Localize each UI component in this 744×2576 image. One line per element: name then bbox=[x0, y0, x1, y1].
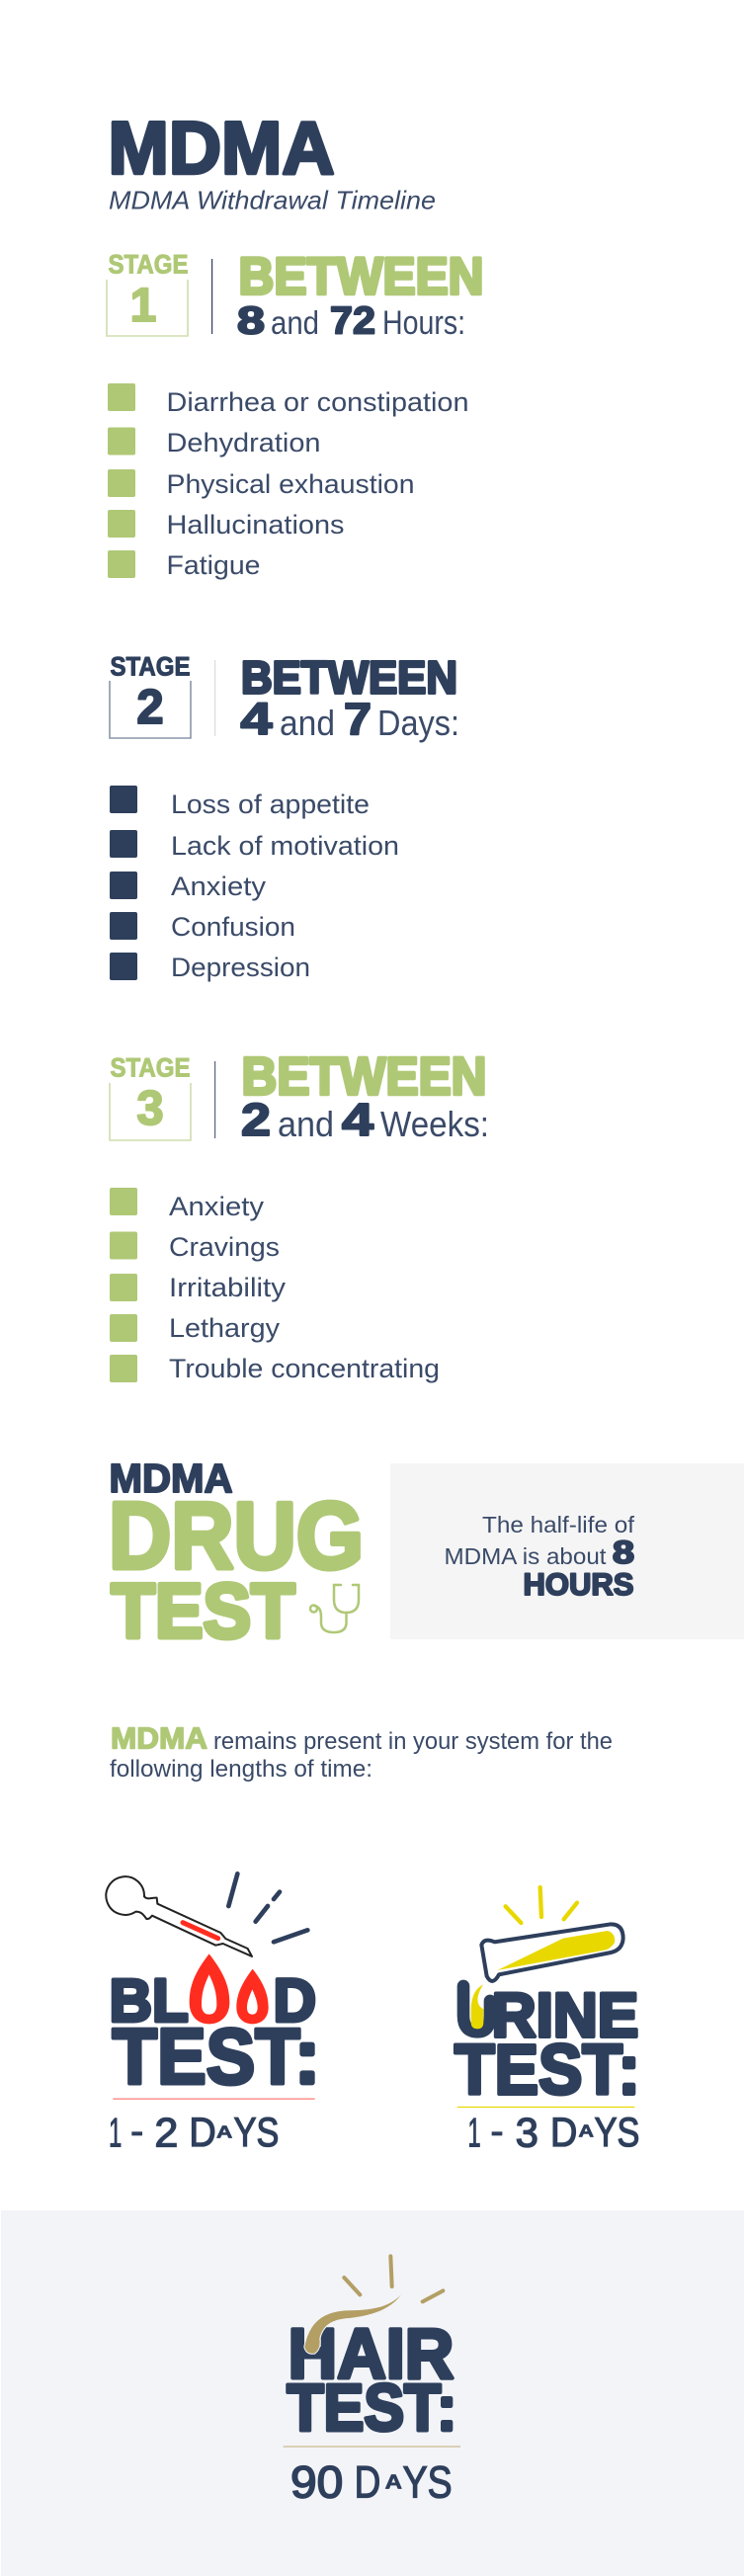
stage 1 heading: Hours: bbox=[382, 304, 465, 342]
stage 2 badge bbox=[110, 652, 191, 738]
panel: stage 1 bbox=[107, 247, 484, 580]
stage 1 heading: BETWEEN bbox=[239, 247, 484, 306]
panel: hair test bbox=[1, 2210, 744, 2576]
stage 3 heading: 4 bbox=[342, 1094, 374, 1145]
duration: 1 - 3 days: D bbox=[550, 2109, 577, 2155]
stage 1 symptom list: Diarrhea or constipation bbox=[166, 387, 468, 417]
callout text: 8 bbox=[613, 1535, 634, 1570]
duration: 1 - 3 days: YS bbox=[595, 2109, 639, 2155]
stage 2 symptom list: Confusion bbox=[171, 912, 295, 942]
duration: 90 days bbox=[290, 2457, 453, 2508]
text block: detection intro bbox=[110, 1721, 613, 1783]
stage 1 divider bbox=[211, 259, 212, 334]
stage 1 heading: 8 bbox=[237, 300, 265, 342]
heading: MDMA: MDMA bbox=[109, 1455, 233, 1501]
stage 1 badge: STAGE bbox=[109, 249, 188, 279]
divider line bbox=[457, 2107, 634, 2108]
icon: hair strand bbox=[304, 2294, 401, 2354]
callout text: The half-life of bbox=[482, 1512, 635, 1537]
stage 1 symptom list: Physical exhaustion bbox=[166, 469, 415, 499]
stage 3 divider bbox=[214, 1061, 215, 1138]
stage 3 symptom list: Trouble concentrating bbox=[169, 1354, 440, 1383]
divider line bbox=[284, 2446, 460, 2448]
duration: 1 - 3 days bbox=[467, 2109, 639, 2155]
panel: stage 3 bbox=[110, 1047, 489, 1383]
heading: BLOOD TEST: D bbox=[274, 1967, 316, 2036]
stage 3 heading: 2 bbox=[241, 1094, 271, 1145]
stage 3 symptom list: Lethargy bbox=[169, 1313, 281, 1343]
stage 2 symptom list: Loss of appetite bbox=[171, 789, 370, 819]
stage 2 symptom list bbox=[110, 786, 399, 982]
text block: detection intro: following lengths of time: bbox=[110, 1756, 372, 1783]
panel background bbox=[1, 2210, 744, 2576]
duration: 1 - 3 days: 3 bbox=[516, 2109, 538, 2155]
stage 2 heading bbox=[241, 652, 459, 744]
heading: BLOOD TEST: BL bbox=[110, 1967, 189, 2036]
icon: test tube bbox=[481, 1924, 623, 1981]
stage 2 divider bbox=[214, 660, 215, 736]
icon: dropper rays bbox=[228, 1873, 307, 1942]
duration: 1 - 2 days: A bbox=[216, 2121, 232, 2141]
stage 1 symptom list: Dehydration bbox=[166, 428, 320, 457]
stage 2 heading: 4 bbox=[241, 694, 273, 744]
icon: hair rays bbox=[344, 2256, 443, 2301]
stage 3 heading bbox=[241, 1047, 489, 1145]
stage 3 badge: STAGE bbox=[111, 1053, 190, 1083]
stage 1 heading: and bbox=[271, 304, 319, 341]
stage 3 badge bbox=[110, 1053, 191, 1140]
duration: 90 days: 90 bbox=[290, 2457, 343, 2508]
subtitle: MDMA Withdrawal Timeline bbox=[109, 186, 436, 215]
callout background bbox=[390, 1463, 744, 1639]
stage 3 badge: 3 bbox=[136, 1082, 164, 1135]
icon: test tube rays bbox=[506, 1887, 577, 1923]
stage 2 badge: STAGE bbox=[111, 652, 190, 682]
stage 3 symptom list: Cravings bbox=[169, 1232, 280, 1262]
stage 3 symptom list bbox=[110, 1188, 440, 1383]
stage 1 heading bbox=[237, 247, 484, 342]
stage 1 badge: 1 bbox=[130, 280, 156, 332]
stage 2 symptom list: Depression bbox=[171, 953, 310, 982]
stage 2 badge: 2 bbox=[136, 681, 164, 734]
heading: URINE TEST bbox=[455, 1981, 638, 2110]
heading: TEST: TEST bbox=[111, 1567, 294, 1654]
panel: drug test heading bbox=[109, 1455, 364, 1654]
heading: HAIR TEST: HAIR bbox=[289, 2315, 454, 2394]
duration: 1 - 2 days: D bbox=[189, 2109, 216, 2155]
heading: HAIR TEST bbox=[287, 2315, 454, 2445]
stage 1 symptom list bbox=[108, 383, 468, 580]
heading: URINE TEST: TEST bbox=[455, 2031, 622, 2110]
stage 2 heading: and bbox=[280, 703, 335, 743]
callout text bbox=[445, 1512, 635, 1602]
stage 3 symptom list: Irritability bbox=[169, 1273, 287, 1302]
stage 2 symptom list: Anxiety bbox=[171, 872, 267, 901]
heading: HAIR TEST: TEST bbox=[287, 2371, 441, 2445]
duration: 1 - 3 days: 1 bbox=[467, 2109, 481, 2155]
heading: BLOOD TEST: TEST bbox=[113, 2012, 300, 2100]
stage 3 symptom list: Anxiety bbox=[169, 1192, 265, 1221]
stage 1 symptom list: Fatigue bbox=[166, 550, 261, 580]
heading: URINE TEST: RINE bbox=[492, 1981, 638, 2050]
heading: BLOOD TEST bbox=[110, 1953, 316, 2100]
stage 1 badge bbox=[107, 249, 188, 336]
stage 3 heading: and bbox=[278, 1104, 334, 1144]
header bbox=[109, 107, 436, 215]
stage 2 heading: BETWEEN bbox=[241, 652, 457, 704]
stage 2 heading: 7 bbox=[344, 694, 372, 744]
icon: dropper bbox=[106, 1876, 252, 1956]
duration: 1 - 2 days bbox=[109, 2109, 279, 2155]
stage 1 symptom list: Hallucinations bbox=[166, 510, 344, 540]
icon: stethoscope bbox=[310, 1585, 359, 1632]
duration: 1 - 2 days: 2 bbox=[154, 2109, 178, 2155]
title: MDMA bbox=[109, 107, 334, 190]
divider line bbox=[113, 2098, 315, 2100]
panel: stage 2 bbox=[110, 652, 459, 982]
duration: 90 days: A bbox=[385, 2471, 402, 2493]
panel: blood test bbox=[106, 1873, 316, 2155]
callout text: HOURS bbox=[524, 1566, 634, 1602]
stage 1 heading: 72 bbox=[330, 300, 375, 342]
stage 3 heading: Weeks: bbox=[380, 1104, 489, 1144]
duration: 90 days: D bbox=[355, 2457, 380, 2508]
stage 2 heading: Days: bbox=[377, 703, 459, 743]
heading: DRUG: DRUG bbox=[109, 1483, 364, 1589]
panel: urine test bbox=[455, 1887, 639, 2155]
duration: 1 - 2 days: YS bbox=[234, 2109, 279, 2155]
panel: half-life callout bbox=[390, 1463, 744, 1639]
stage 3 heading: BETWEEN bbox=[241, 1047, 486, 1107]
text block: detection intro: MDMA bbox=[111, 1721, 207, 1755]
duration: 90 days: YS bbox=[403, 2457, 453, 2508]
stage 2 symptom list: Lack of motivation bbox=[171, 831, 399, 861]
text block: detection intro: remains present in your system for the bbox=[213, 1728, 613, 1755]
duration: 1 - 2 days: 1 bbox=[109, 2109, 122, 2155]
duration: 1 - 3 days: A bbox=[578, 2121, 594, 2141]
callout text: MDMA is about bbox=[445, 1543, 607, 1569]
